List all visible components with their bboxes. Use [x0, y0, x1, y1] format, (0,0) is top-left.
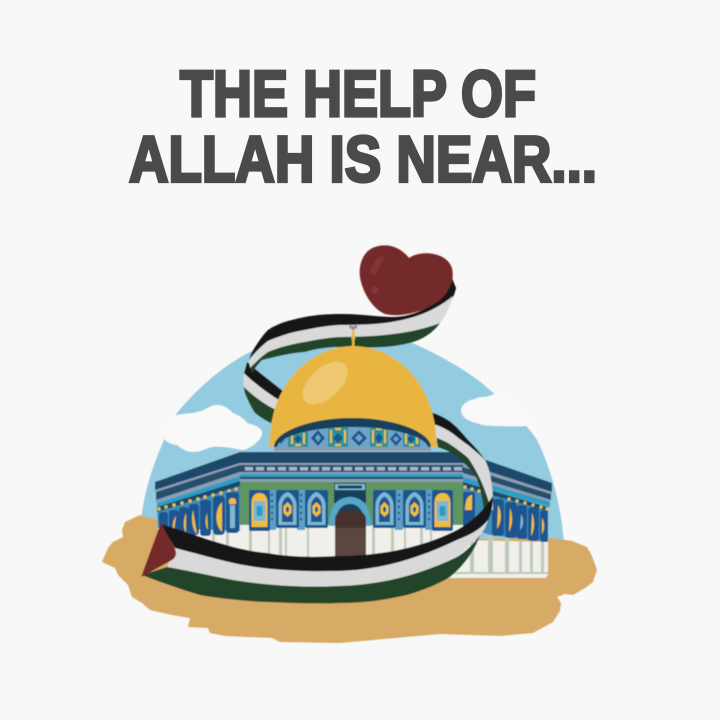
sand ground — [102, 515, 597, 643]
drum mosaic — [276, 426, 428, 448]
finial — [349, 323, 358, 348]
cloud left — [163, 405, 262, 452]
drum — [274, 418, 431, 447]
golden dome — [268, 346, 438, 447]
cloud right — [461, 392, 535, 426]
ribbon: front segment — [142, 496, 493, 603]
central roof tiles — [245, 467, 462, 470]
facade windows — [249, 490, 453, 531]
dome highlight — [295, 354, 355, 412]
building — [155, 452, 552, 578]
drum base line — [274, 447, 431, 451]
left wing windows — [159, 492, 239, 536]
title: ALLAH IS NEAR... — [129, 122, 597, 196]
left wing yellow dots — [157, 487, 238, 511]
left wing roof bands — [155, 452, 240, 490]
left wing white wall — [158, 522, 240, 565]
illustration: Dome of the Rock with ribbon — [102, 245, 597, 643]
central green wall — [240, 482, 463, 526]
white stripe — [167, 520, 488, 587]
dome — [268, 323, 438, 451]
ribbon: right segment — [430, 412, 493, 510]
right wing windows — [463, 492, 548, 542]
heart highlights — [370, 256, 385, 276]
central roof — [240, 452, 463, 463]
infographic canvas — [102, 68, 598, 644]
ribbon: left segment behind dome — [243, 362, 284, 424]
flag triangle — [142, 524, 175, 576]
right wing roof bands — [463, 452, 552, 492]
heart — [360, 245, 453, 315]
doorway — [329, 483, 371, 557]
ribbon: top segment — [249, 278, 456, 373]
title: THE HELP OF — [180, 57, 536, 130]
right wing wall and columns — [440, 540, 548, 578]
right wing yellow dots — [463, 485, 549, 511]
title — [129, 57, 597, 196]
right wing upper wall — [462, 482, 548, 542]
central white wall with columns — [240, 525, 463, 557]
black stripe — [160, 496, 493, 571]
left wing upper wall — [157, 483, 240, 531]
sky semicircle — [140, 323, 564, 545]
green stripe — [142, 535, 480, 603]
facade window bands — [268, 490, 276, 530]
